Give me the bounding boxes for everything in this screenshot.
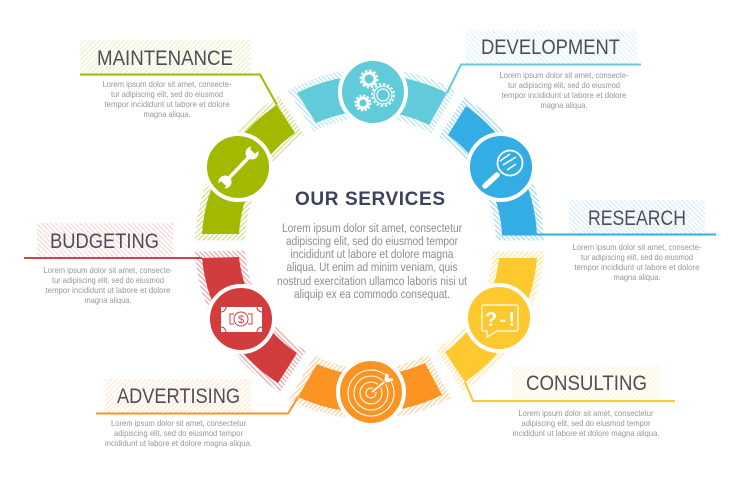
text: development description: tur adipiscing elit, sed do eiusmod — [508, 80, 620, 90]
text: maintenance description: Lorem ipsum dolor sit amet, consecte- — [102, 79, 232, 89]
text: budgeting description: Lorem ipsum dolor sit amet, consecte- — [44, 265, 173, 275]
heading: development: DEVELOPMENT — [481, 35, 620, 59]
text: development description: Lorem ipsum dolor sit amet, consecte- — [500, 70, 629, 80]
heading: consulting: CONSULTING — [526, 371, 647, 395]
title: OUR SERVICES — [295, 189, 445, 210]
text: advertising description — [105, 418, 252, 448]
text: maintenance description: tur adipiscing elit, sed do eiusmod — [111, 89, 223, 99]
text: center description: adipiscing elit, sed do eiusmod tempor — [286, 234, 458, 248]
text: research description: magna aliqua. — [614, 272, 660, 282]
panel: advertising — [96, 379, 298, 448]
panel: development — [447, 30, 641, 110]
text: center description: nostrud exercitation ullamco laboris nisi ut — [277, 274, 467, 288]
segment: budgeting red — [202, 257, 297, 383]
text: consulting description: adipiscing elit, sed do eiusmod tempor — [522, 418, 651, 428]
panel: research — [502, 200, 716, 282]
text: budgeting description: magna aliqua. — [84, 295, 132, 305]
icon: speech bubble — [466, 285, 532, 351]
panel: maintenance — [80, 40, 277, 119]
heading: research: RESEARCH — [588, 206, 686, 230]
text: research description — [572, 242, 702, 282]
icon: magnifier — [468, 134, 534, 200]
icon: gears — [340, 59, 406, 125]
text: center description — [277, 221, 467, 301]
icon: banknote — [208, 286, 274, 352]
text: maintenance description — [102, 79, 232, 119]
segment: consulting yellow — [445, 258, 537, 382]
text: center description: aliqua. Ut enim ad minim veniam, quis — [286, 260, 458, 274]
text: center description: aliquip ex ea commodo consequat. — [294, 287, 450, 301]
icon: banknote: $ — [238, 314, 244, 326]
text: consulting description: incididunt ut labore et dolore magna aliqua. — [512, 428, 660, 438]
icon: wrench — [205, 134, 271, 200]
text: budgeting description: tempor incididunt ut labore et dolore — [46, 285, 171, 295]
text: consulting description: Lorem ipsum dolor sit amet, consectetur — [518, 408, 654, 418]
panel: consulting — [465, 366, 675, 438]
text: center description: incididunt ut labore et dolore magna — [290, 247, 454, 261]
text: research description: Lorem ipsum dolor sit amet, consecte- — [572, 242, 702, 252]
panel: budgeting — [24, 223, 202, 305]
text: advertising description: incididunt ut labore et dolore magna aliqua. — [105, 438, 252, 448]
text: consulting description — [512, 408, 660, 438]
text: budgeting description: tur adipiscing elit, sed do eiusmod — [52, 275, 164, 285]
heading: budgeting: BUDGETING — [50, 229, 159, 253]
text: development description: tempor incididunt ut labore et dolore — [502, 90, 627, 100]
segment: research blue — [448, 106, 537, 234]
text: development description — [500, 70, 629, 110]
segment: development teal — [297, 75, 447, 125]
text: research description: tempor incididunt ut labore et dolore — [574, 262, 700, 272]
icon: target — [338, 359, 404, 425]
text: advertising description: adipiscing elit, sed do eiusmod tempor — [114, 428, 243, 438]
segment: maintenance green — [202, 105, 295, 234]
heading: maintenance: MAINTENANCE — [97, 46, 233, 70]
text: maintenance description: magna aliqua. — [144, 109, 190, 119]
text: budgeting description — [44, 265, 173, 305]
text: center description: Lorem ipsum dolor sit amet, consectetur — [282, 221, 462, 235]
icon: speech bubble: ?-! — [485, 309, 515, 331]
segment: target orange — [298, 363, 442, 412]
text: development description: magna aliqua. — [540, 100, 588, 110]
text: advertising description: Lorem ipsum dolor sit amet, consectetur — [111, 418, 246, 428]
text: research description: tur adipiscing elit, sed do eiusmod — [581, 252, 693, 262]
heading: advertising: ADVERTISING — [117, 384, 240, 408]
text: maintenance description: tempor incididunt ut labore et dolore — [104, 99, 230, 109]
